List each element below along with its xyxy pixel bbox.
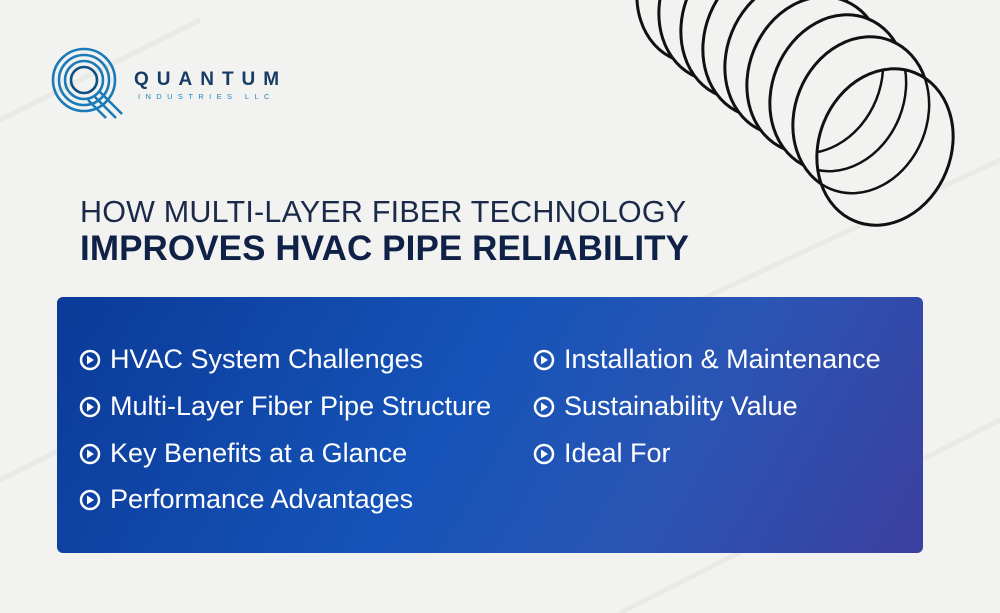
item: Ideal For: Ideal For [564, 438, 671, 468]
item: Installation & Maintenance: Installation & Maintenance [564, 344, 881, 374]
item: Key Benefits: Key Benefits at a Glance [110, 438, 407, 468]
item: Performance Advantages: Performance Advantages [110, 484, 413, 514]
item: Multi-Layer Fiber Pipe Structure: Multi-Layer Fiber Pipe Structure [110, 391, 491, 421]
title line 2: IMPROVES HVAC PIPE RELIABILITY [80, 229, 689, 268]
icon: Q rings [52, 48, 123, 119]
logo: INDUSTRIES LLC [138, 92, 275, 101]
panel: topics [57, 297, 923, 553]
item: HVAC System Challenges: HVAC System Challenges [110, 344, 423, 374]
logo text: QUANTUM [134, 69, 287, 90]
pipe illustration [636, 0, 955, 227]
title line 1: HOW MULTI-LAYER FIBER TECHNOLOGY [80, 195, 686, 229]
logo [52, 48, 287, 119]
item: Sustainability Value: Sustainability Value [564, 391, 798, 421]
